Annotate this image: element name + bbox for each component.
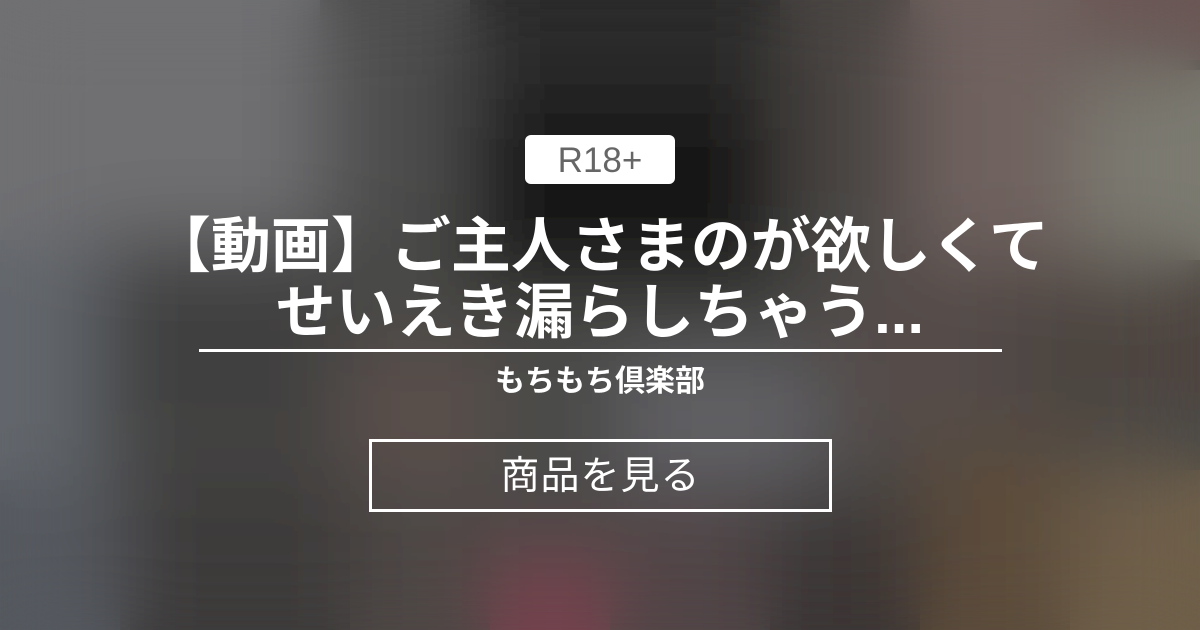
creator name: もちもち倶楽部 xyxy=(495,365,705,398)
title xyxy=(151,213,1049,346)
title: せいえき漏らしちゃう... xyxy=(276,279,924,346)
badge: R18+ xyxy=(525,135,675,184)
button: view product xyxy=(369,439,832,512)
button: view product: 商品を見る xyxy=(500,455,700,498)
divider line xyxy=(199,349,1002,352)
badge: R18+: R18+ xyxy=(558,141,642,180)
title: 【動画】ご主人さまのが欲しくて xyxy=(151,213,1049,280)
